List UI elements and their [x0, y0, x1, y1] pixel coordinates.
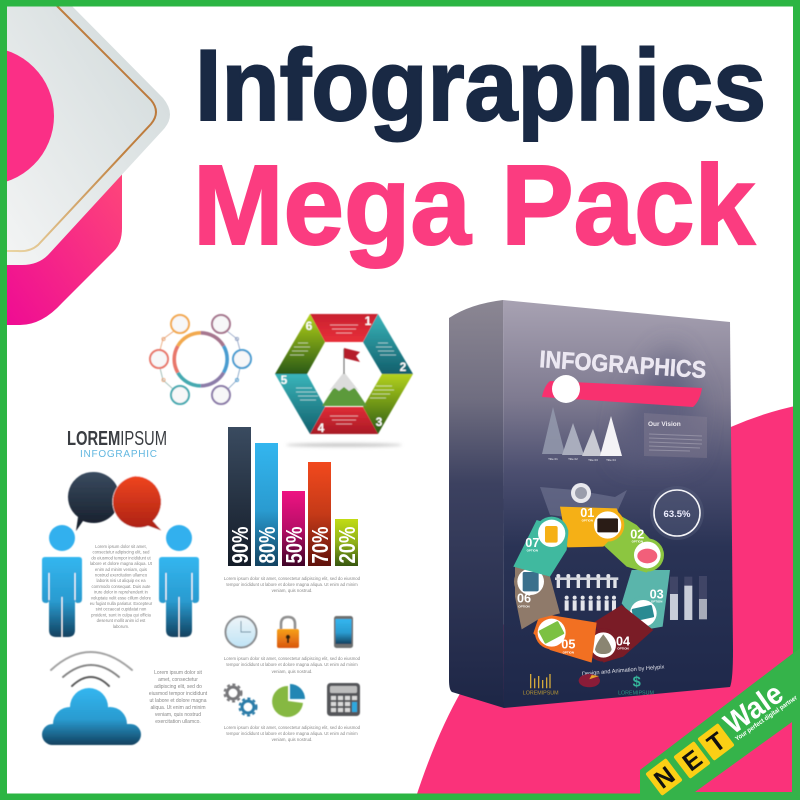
triangle chart: Title 01: [548, 457, 558, 461]
logo: gold bars: [523, 674, 559, 697]
option labels: [518, 519, 662, 655]
conversation body text: commodo consequat. Duis aute: [92, 584, 151, 589]
bar 20%: 20%: [334, 526, 360, 564]
cloud text: exercitation ullamco.: [155, 719, 201, 725]
bar chart caption: tempor incididunt ut labore et dolore magna aliqua. Ut enim ad minim: [226, 582, 358, 587]
segment 5: [275, 374, 325, 434]
bar 70%: 70%: [307, 526, 333, 564]
conversation body text: irure dolor in reprehenderit in: [94, 590, 149, 595]
icon caption upper: tempor incididunt ut labore et dolore magna aliqua. Ut enim ad minim: [226, 662, 358, 667]
banner band: [640, 648, 800, 800]
segment 03: [622, 570, 670, 631]
cloud text: adipiscing elit, sed do: [154, 684, 202, 690]
title line: Infographics: Infographics: [195, 30, 766, 142]
person: left: [42, 525, 82, 637]
segment 06: 06: [517, 592, 531, 606]
conversation body text: voluptate velit esse cillum dolore: [91, 595, 152, 600]
gauge 63.5%: 63.5%: [664, 509, 691, 520]
bar chart caption: veniam, quis nostrud.: [272, 588, 312, 593]
segment 03: 03: [650, 587, 664, 601]
conversation body text: sint occaecat cupidatat non: [96, 607, 147, 612]
segment numbers: 6: [306, 319, 313, 333]
bar 80%: 80%: [254, 526, 280, 564]
white circle: [552, 375, 580, 403]
our vision panel: Our Vision: [648, 421, 681, 428]
triangle chart: Title 02: [568, 457, 578, 461]
pink title bar: [542, 381, 702, 407]
rear pink hexagon: [0, 150, 122, 325]
segment 01: 01: [580, 506, 594, 520]
green corner banner: [640, 648, 800, 800]
bar chart: [227, 427, 360, 566]
cloud text: eiusmod tempor incididunt: [149, 691, 208, 697]
segment 07: [513, 517, 568, 577]
option labels: OPTION: [582, 519, 593, 523]
tile E: E: [678, 745, 708, 777]
people conversation: [42, 472, 199, 637]
credit line: Design and Animation by Helypix: [582, 664, 665, 678]
ring diagram with six nodes: [150, 315, 251, 404]
person: right: [159, 525, 199, 637]
segment 1: [310, 314, 378, 342]
icon: padlock: [277, 617, 299, 648]
wifi arcs: [51, 652, 132, 686]
node: teal: [171, 386, 189, 404]
bar chart caption: [224, 576, 361, 593]
people silhouettes: [555, 574, 618, 611]
logo: dollar: $: [633, 675, 641, 691]
conversation body text: laborum.: [113, 624, 129, 629]
icon: smartphone: [334, 616, 353, 648]
brand: Wale: Wale: [718, 677, 789, 741]
logo: maroon pie: [579, 674, 600, 687]
cloud text: ut labore et dolore magna: [150, 698, 207, 704]
icon caption upper: [224, 656, 361, 674]
conversation body text: eu fugiat nulla pariatur. Excepteur: [90, 601, 153, 606]
segment 02: [603, 512, 664, 573]
option labels: OPTION: [563, 651, 574, 655]
conversation body text: [90, 544, 153, 629]
icon: clock: [226, 616, 256, 648]
title line: Mega Pack: Mega Pack: [193, 142, 755, 268]
box side face: [449, 300, 504, 708]
cloud: [42, 688, 141, 745]
speech bubble: red: [113, 476, 162, 531]
option labels: OPTION: [651, 600, 662, 604]
gauge 63.5%: [650, 486, 704, 540]
icon: wifi cloud: [42, 652, 141, 745]
bar chart caption: Lorem ipsum dolor sit amet, consectetur adipiscing elit, sed do eiusmod: [224, 576, 361, 581]
segment 05: [533, 613, 597, 663]
segment 6: [275, 314, 325, 374]
icon: pie chart: [272, 684, 305, 717]
node: purple: [212, 386, 230, 404]
icon caption lower: tempor incididunt ut labore et dolore magna aliqua. Ut enim ad minim: [226, 731, 358, 736]
mini bar chart: [670, 576, 707, 620]
conversation body text: consectetur adipiscing elit, sed: [92, 550, 150, 555]
hexagon diagram: [275, 314, 413, 435]
logo: gold bars: LOREMIPSUM: [523, 691, 559, 697]
conversation body text: proident, sunt in culpa qui officia: [91, 612, 152, 617]
segment numbers: [281, 314, 407, 435]
segment text lines: [290, 325, 396, 424]
segment numbers: 5: [281, 373, 288, 387]
conversation body text: deserunt mollit anim id est: [97, 618, 146, 623]
tile T: T: [702, 727, 731, 759]
pink background swoosh: [415, 405, 800, 800]
segment 01: [560, 506, 624, 547]
node: blue: [233, 350, 251, 368]
hexagon shadow: [286, 443, 402, 447]
option labels: OPTION: [617, 647, 629, 651]
option labels: OPTION: [527, 548, 538, 552]
node: mauve: [212, 315, 230, 333]
triangle chart: [542, 407, 622, 462]
conversation body text: nostrud exercitation ullamco: [95, 572, 148, 578]
segment 07: 07: [525, 536, 539, 550]
copper outline: [0, 6, 156, 251]
bar 50%: 50%: [281, 526, 307, 564]
segment 4: [310, 407, 378, 434]
icon caption upper: Lorem ipsum dolor sit amet, consectetur adipiscing elit, sed do eiusmod: [224, 656, 361, 661]
corner decoration: pink and grey tag: [0, 0, 170, 325]
segment 02: 02: [630, 527, 644, 541]
segment 04: [587, 605, 653, 663]
product box: [445, 295, 736, 715]
segment 3: [363, 374, 413, 434]
heading: LOREMIPSUM: LOREMIPSUM: [67, 428, 167, 450]
tile E: [673, 741, 711, 780]
conversation body text: Lorem ipsum dolor sit amet,: [95, 544, 147, 549]
box title: INFOGRAPHICS: [539, 346, 707, 384]
connector lines: [160, 331, 240, 389]
segment 06: [514, 565, 560, 629]
brand heading: [67, 428, 167, 460]
node: coral: [150, 350, 168, 368]
speech bubble: dark: [68, 472, 120, 531]
cloud text: Lorem ipsum dolor sit: [154, 670, 203, 676]
wheel diagram: [513, 506, 707, 697]
title: [193, 30, 766, 268]
bar 90%: 90%: [227, 526, 253, 564]
box front face: [500, 295, 736, 715]
icon caption lower: veniam, quis nostrud.: [272, 737, 312, 742]
option labels: OPTION: [632, 539, 643, 543]
conversation body text: laboris nisi ut aliquip ex ea: [96, 578, 146, 583]
pink triangle: [695, 722, 792, 792]
icon: mountain with flag: [322, 348, 367, 406]
pink circle: [0, 47, 54, 185]
map silhouette: [540, 487, 627, 520]
option labels: OPTION: [518, 604, 530, 608]
logo: dollar: LOREMIPSUM: [618, 691, 654, 697]
tile N: N: [649, 761, 680, 794]
triangle chart: Title 03: [588, 458, 598, 462]
heading: INFOGRAPHIC: INFOGRAPHIC: [80, 449, 157, 460]
icon caption lower: Lorem ipsum dolor sit amet, consectetur adipiscing elit, sed do eiusmod: [224, 725, 361, 730]
segment 2: [363, 314, 413, 374]
grey rounded diamond: [0, 0, 170, 265]
tile T: [697, 723, 735, 762]
conversation body text: labore et dolore magna aliqua. Ut: [90, 561, 153, 566]
segment numbers: 1: [365, 314, 372, 328]
segment numbers: 4: [318, 421, 325, 435]
icon grid: [224, 616, 360, 717]
icon: gears: [224, 684, 256, 716]
pin: [571, 483, 591, 503]
our vision panel: [644, 413, 707, 458]
segment 04: 04: [616, 634, 630, 648]
segment 05: 05: [561, 638, 575, 652]
triangle chart: Title 04: [606, 458, 616, 462]
cloud text: veniam, quis nostrud: [155, 712, 201, 718]
cloud text: [149, 670, 208, 725]
conversation body text: do eiusmod tempor incididunt ut: [91, 555, 152, 560]
segment numbers: 3: [376, 415, 383, 429]
cloud text: aliqua. Ut enim ad minim: [150, 705, 206, 711]
icon: calculator: [327, 683, 360, 716]
logo: dollar: [618, 675, 654, 697]
icon caption upper: veniam, quis nostrud.: [272, 669, 312, 674]
icon caption lower: [224, 725, 361, 742]
segment numbers: 2: [400, 360, 407, 374]
conversation body text: enim ad minim veniam, quis: [95, 567, 147, 572]
ring segments: [174, 333, 227, 386]
cloud text: amet, consectetur: [158, 677, 198, 683]
node: orange: [171, 315, 189, 333]
